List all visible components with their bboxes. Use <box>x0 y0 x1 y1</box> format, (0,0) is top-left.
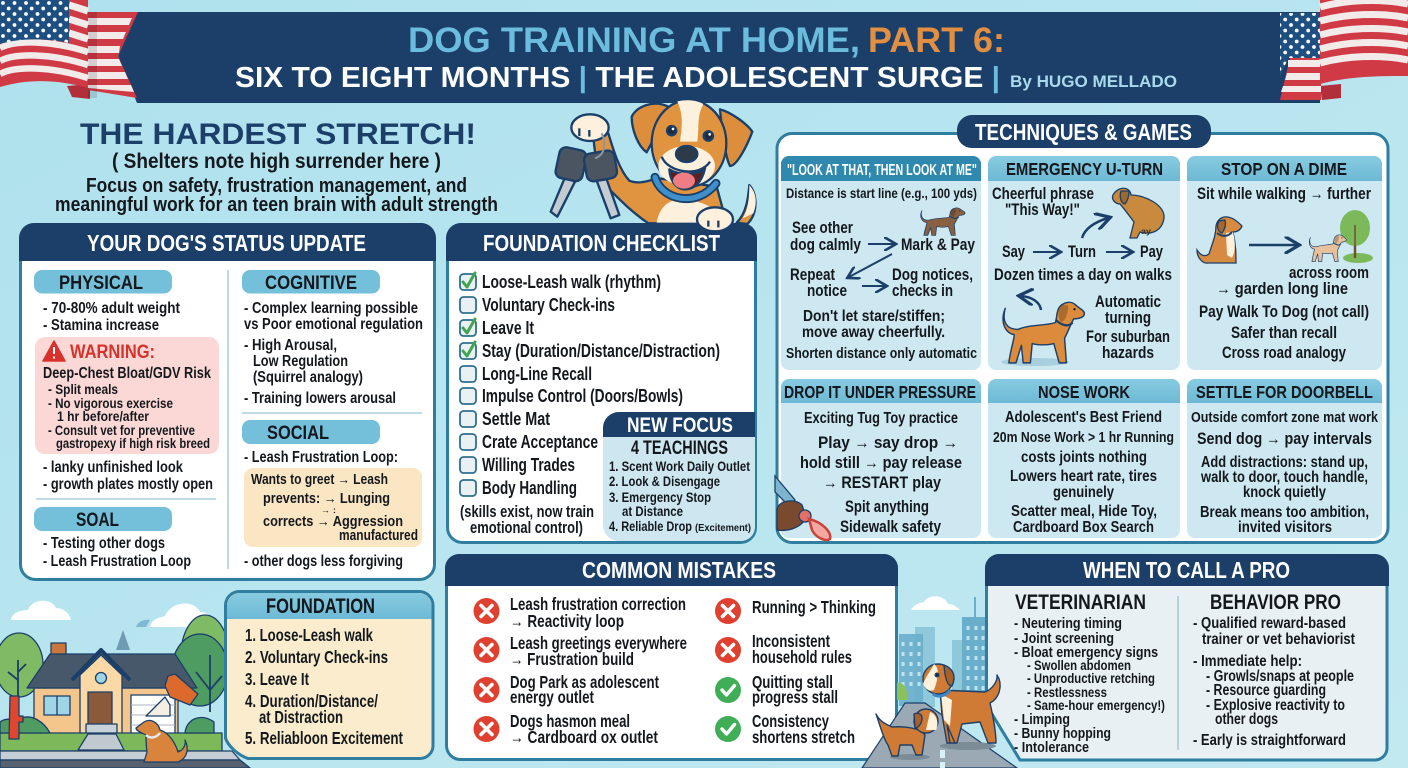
callout: frustration loop: Wants to greet → Leash <box>251 472 388 488</box>
behavior pro column: - Qualified reward-based <box>1193 615 1346 632</box>
behavior pro column: - Growls/snaps at people <box>1206 668 1354 685</box>
card: emergency u-turn: Dozen times a day on walks <box>994 266 1172 284</box>
right tree <box>172 615 229 712</box>
social section: SOCIAL <box>267 422 329 444</box>
icon: walking dog <box>1309 235 1346 262</box>
left tree <box>0 633 43 700</box>
card: look at that: checks in <box>892 282 953 300</box>
icon: left flag <box>0 0 138 99</box>
road <box>862 703 1017 768</box>
card: look at that: Dog notices, <box>892 266 973 284</box>
shelter note: ( Shelters note high surrender here ) <box>112 150 441 173</box>
panel: status update <box>19 223 436 580</box>
headline block <box>55 118 498 216</box>
checklist items: Crate Acceptance <box>482 431 598 452</box>
panel: foundation list <box>226 592 433 758</box>
checklist note <box>460 503 594 537</box>
physical section: - 70-80% adult weight <box>43 300 180 317</box>
card: stop on a dime: Safer than recall <box>1231 324 1337 342</box>
card: drop it under pressure: Exciting Tug Toy practice <box>804 410 958 427</box>
checklist items: Stay (Duration/Distance/Distraction) <box>482 340 720 361</box>
puppy <box>876 709 938 760</box>
social section: - Leash Frustration Loop: <box>244 449 398 466</box>
card: nose work <box>988 379 1180 538</box>
icon: orange toy on leash <box>146 674 198 716</box>
veterinarian column: - Swollen abdomen <box>1027 658 1131 673</box>
warning box: WARNING: <box>70 341 155 363</box>
status heading: YOUR DOG'S STATUS UPDATE <box>87 230 366 256</box>
checklist items: Body Handling <box>482 477 577 498</box>
warning box <box>35 337 219 454</box>
card: emergency u-turn: hazards <box>1102 344 1154 362</box>
focus sentence line two: meaningful work for an teen brain with adult strength <box>55 193 498 216</box>
icon: tug toy in hand <box>775 476 830 540</box>
physical notes: - lanky unfinished look <box>43 459 183 476</box>
warning box: gastropexy if high risk breed <box>56 436 210 451</box>
card: drop it under pressure: Sidewalk safety <box>840 518 942 536</box>
checklist items: Loose-Leash walk (rhythm) <box>482 271 661 292</box>
mistakes left column: → Frustration build <box>510 649 634 669</box>
byline: By HUGO MELLADO <box>1010 72 1177 91</box>
icon: right flag <box>1280 0 1408 100</box>
card: look at that: Shorten distance only automatic <box>786 346 977 362</box>
cognitive section: - Complex learning possible <box>244 300 418 317</box>
card: look at that: Mark & Pay <box>901 236 976 254</box>
card: settle for doorbell: Add distractions: stand up, <box>1201 454 1368 471</box>
warning box: - No vigorous exercise <box>48 396 173 411</box>
card: nose work: genuinely <box>1053 484 1114 501</box>
mistakes right column: progress stall <box>752 687 838 707</box>
illustration: suburban house scene <box>0 601 250 768</box>
callout: frustration loop: manufactured <box>339 528 418 544</box>
card: look at that: notice <box>807 282 847 300</box>
callout: frustration loop: corrects → Aggression <box>263 514 403 530</box>
icon: sitting dog <box>1197 217 1242 263</box>
foundation list items: 3. Leave It <box>245 669 309 689</box>
checklist items: Long-Line Recall <box>482 363 592 384</box>
checklist heading: FOUNDATION CHECKLIST <box>483 230 720 256</box>
arrow: notice to check-in <box>862 285 885 287</box>
card: settle for doorbell: Break means too ambition, <box>1200 504 1369 521</box>
card: look at that: Repeat <box>790 266 835 284</box>
panel: techniques and games <box>775 115 1388 542</box>
behavior pro column <box>1193 591 1355 749</box>
behavior pro column: BEHAVIOR PRO <box>1210 591 1341 614</box>
checklist items: Settle Mat <box>482 408 550 429</box>
card: drop it under pressure <box>781 379 981 538</box>
veterinarian column: - Unproductive retching <box>1027 671 1155 686</box>
physical notes <box>43 459 213 493</box>
callout: new focus: 1. Scent Work Daily Outlet <box>609 459 750 474</box>
house <box>27 643 197 734</box>
card: emergency u-turn: Say <box>1002 243 1026 261</box>
checklist items: Willing Trades <box>482 454 575 475</box>
arrow: say to turn <box>1033 251 1059 253</box>
arrow: turn to pay <box>1106 251 1131 253</box>
mistakes right column: Quitting stall <box>752 672 833 692</box>
card: settle for doorbell: Outside comfort zone mat work <box>1191 410 1379 426</box>
arrow: curved turn <box>1082 218 1108 238</box>
veterinarian column: VETERINARIAN <box>1015 591 1146 614</box>
social note: - other dogs less forgiving <box>244 553 403 570</box>
icon: fire hydrant <box>9 696 23 739</box>
card: settle for doorbell: knock quietly <box>1243 484 1326 501</box>
veterinarian column: - Limping <box>1014 712 1070 728</box>
cognitive section: - Training lowers arousal <box>244 390 396 407</box>
checklist items <box>460 271 720 498</box>
focus sentence line one: Focus on safety, frustration management, and <box>86 174 467 197</box>
behavior pro column: - Immediate help: <box>1193 653 1302 670</box>
card: nose work: Scatter meal, Hide Toy, <box>1011 503 1157 520</box>
warning box: - Consult vet for preventive <box>48 423 195 438</box>
card: stop on a dime: Cross road analogy <box>1222 344 1347 362</box>
card: emergency u-turn: Automatic <box>1095 293 1161 311</box>
checklist items: Leave It <box>482 317 534 338</box>
physical section: - Stamina increase <box>43 317 159 334</box>
card: emergency u-turn: EMERGENCY U-TURN <box>1006 159 1163 179</box>
card: stop on a dime: Sit while walking → further <box>1197 185 1371 203</box>
card: look at that: Don't let stare/stiffen; <box>803 308 945 325</box>
card: emergency u-turn: "This Way!" <box>1005 201 1080 219</box>
icon: main dog holding keys <box>551 100 756 231</box>
card: emergency u-turn: Turn <box>1068 243 1096 261</box>
panel: foundation checklist <box>446 223 757 542</box>
cognitive section: - High Arousal, <box>244 337 337 354</box>
callout: new focus: 4. Reliable Drop <box>609 519 692 534</box>
shrubs <box>0 717 214 733</box>
section pill heading: TECHNIQUES & GAMES <box>975 119 1192 145</box>
title banner <box>118 12 1320 103</box>
callout: frustration loop <box>244 468 422 547</box>
foundation heading: FOUNDATION <box>266 595 375 618</box>
callout: frustration loop: → : <box>321 506 336 515</box>
card: emergency u-turn: For suburban <box>1086 328 1170 346</box>
card: stop on a dime: across room <box>1289 264 1369 282</box>
behavior pro column: - Early is straightforward <box>1193 732 1346 749</box>
card: drop it under pressure: hold still → pay release <box>800 454 962 472</box>
arrow: sit to further <box>1249 244 1297 246</box>
card: nose work: costs joints nothing <box>1021 449 1147 466</box>
card: settle for doorbell: Send dog → pay intervals <box>1197 430 1372 448</box>
behavior pro column: trainer or vet behaviorist <box>1202 631 1355 648</box>
card: nose work: Adolescent's Best Friend <box>1005 409 1162 426</box>
physical section <box>34 270 180 334</box>
card: nose work: Cardboard Box Search <box>1013 519 1154 536</box>
foundation list items: 2. Voluntary Check-ins <box>245 647 388 667</box>
title line one: DOG TRAINING AT HOME, <box>408 21 860 60</box>
checklist items: Impulse Control (Doors/Bowls) <box>482 385 683 406</box>
checklist note: (skills exist, now train <box>460 503 594 521</box>
section pill heading <box>957 115 1211 148</box>
soal section: - Testing other dogs <box>43 535 165 552</box>
arrow: calm to mark <box>868 243 894 245</box>
mistakes right column: household rules <box>752 647 852 667</box>
card: stop on a dime: → garden long line <box>1216 280 1348 298</box>
mistakes right column: Running > Thinking <box>752 597 876 617</box>
physical notes: - growth plates mostly open <box>43 476 213 493</box>
icon: turning dog <box>1113 188 1164 238</box>
checklist note: emotional control) <box>470 519 583 537</box>
veterinarian column: - Intolerance <box>1014 740 1089 756</box>
arrow: turning back <box>1021 296 1041 310</box>
veterinarian column: - Same-hour emergency!) <box>1027 698 1165 713</box>
card: look at that: move away cheerfully. <box>802 324 945 341</box>
callout: new focus <box>603 412 755 541</box>
cognitive section <box>242 270 423 407</box>
social section <box>242 420 398 466</box>
warning box: Deep-Chest Bloat/GDV Risk <box>43 365 211 382</box>
callout: new focus: at Distance <box>622 504 683 519</box>
lawn and street <box>0 733 250 768</box>
card: nose work: NOSE WORK <box>1038 382 1130 402</box>
soal section: SOAL <box>76 509 119 531</box>
city buildings <box>899 597 986 710</box>
foundation list items: at Distraction <box>259 707 343 727</box>
checklist items: Voluntary Check-ins <box>482 294 615 315</box>
card: settle for doorbell <box>1187 379 1382 538</box>
cognitive section: Low Regulation <box>253 353 348 370</box>
icon: brown dog <box>921 208 965 235</box>
card: stop on a dime: STOP ON A DIME <box>1221 159 1347 179</box>
cognitive section: vs Poor emotional regulation <box>244 316 423 333</box>
illustration: city and road scene <box>862 596 1017 768</box>
card: drop it under pressure: Spit anything <box>845 498 929 516</box>
mistakes left column: Dog Park as adolescent <box>510 672 659 692</box>
mistakes right column: Consistency <box>752 711 829 731</box>
icon: warning triangle <box>43 341 65 361</box>
card: look at that <box>781 156 981 370</box>
card: settle for doorbell: SETTLE FOR DOORBELL <box>1196 382 1373 402</box>
callout: new focus: 2. Look & Disengage <box>609 474 720 489</box>
callout: new focus: NEW FOCUS <box>627 414 733 437</box>
soal section: - Leash Frustration Loop <box>43 553 191 570</box>
cognitive section: COGNITIVE <box>265 272 357 294</box>
veterinarian column: - Restlessness <box>1027 685 1107 700</box>
mistakes right column: shortens stretch <box>752 727 855 747</box>
mistakes left column: energy outlet <box>510 687 594 707</box>
veterinarian column: - Neutering timing <box>1014 616 1122 632</box>
icon: adult dog and puppy <box>876 664 1000 760</box>
mistakes left column: Leash frustration correction <box>510 594 686 614</box>
title part number: PART 6: <box>868 21 1005 60</box>
mistakes left column: Leash greetings everywhere <box>510 633 687 653</box>
callout: frustration loop: prevents: → Lunging <box>263 491 390 507</box>
clouds <box>11 601 216 627</box>
callout: new focus: 3. Emergency Stop <box>609 490 711 505</box>
callout: new focus: 4 TEACHINGS <box>631 437 728 459</box>
panel: common mistakes <box>445 554 898 760</box>
warning box: 1 hr before/after <box>57 409 150 424</box>
bush <box>897 683 908 700</box>
card: stop on a dime <box>1187 156 1382 370</box>
behavior pro column: other dogs <box>1215 711 1278 728</box>
icon: sitting puppy <box>136 720 187 762</box>
icons: status marks <box>474 598 741 742</box>
cognitive section: (Squirrel analogy) <box>253 369 363 386</box>
veterinarian column: - Bloat emergency signs <box>1014 645 1158 661</box>
card: settle for doorbell: walk to door, touch handle, <box>1200 469 1368 486</box>
card: nose work: 20m Nose Work > 1 hr Running <box>993 430 1174 446</box>
icon: orange dog standing <box>1001 302 1084 366</box>
soal section <box>34 507 191 570</box>
foundation list items: 4. Duration/Distance/ <box>245 691 378 711</box>
behavior pro column: - Explosive reactivity to <box>1206 697 1345 714</box>
mistakes right column: Inconsistent <box>752 631 830 651</box>
foundation list items <box>245 625 403 748</box>
cloud <box>911 596 960 610</box>
card: emergency u-turn: turning <box>1105 309 1151 327</box>
physical section: PHYSICAL <box>59 272 143 294</box>
mistakes left column <box>510 594 687 747</box>
card: look at that: "LOOK AT THAT, THEN LOOK AT ME" <box>787 162 977 179</box>
pro heading: WHEN TO CALL A PRO <box>1083 557 1290 583</box>
icon: tree <box>1340 210 1373 263</box>
foundation list items: 1. Loose-Leash walk <box>245 625 373 645</box>
panel: when to call a pro <box>985 554 1389 760</box>
behavior pro column: - Resource guarding <box>1206 682 1326 699</box>
foundation list items: 5. Reliabloon Excitement <box>245 728 403 748</box>
mistakes left column: Dogs hasmon meal <box>510 711 630 731</box>
adult dog <box>923 664 1000 750</box>
card: drop it under pressure: Play → say drop → <box>818 434 958 452</box>
card: drop it under pressure: → RESTART play <box>823 474 942 492</box>
mistakes right column <box>752 597 876 747</box>
arrow: mark to repeat <box>849 254 892 277</box>
callout: new focus: (Excitement) <box>695 522 751 534</box>
mistakes heading: COMMON MISTAKES <box>582 557 776 583</box>
veterinarian column <box>1014 591 1165 756</box>
mistakes left column: → Cardboard ox outlet <box>510 727 658 747</box>
veterinarian column: - Joint screening <box>1014 631 1114 647</box>
card: settle for doorbell: invited visitors <box>1238 519 1332 536</box>
headline: THE HARDEST STRETCH! <box>80 118 476 151</box>
card: emergency u-turn: Cheerful phrase <box>992 185 1094 203</box>
card: emergency u-turn <box>988 156 1180 370</box>
mistakes left column: → Reactivity loop <box>510 611 624 631</box>
card: look at that: See other <box>792 219 853 237</box>
veterinarian column: - Bunny hopping <box>1014 726 1111 742</box>
card: look at that: dog calmly <box>790 236 862 254</box>
card: look at that: Distance is start line (e.g., 100 yds) <box>786 186 977 201</box>
icon: turning dog: ay <box>1141 227 1152 236</box>
card: drop it under pressure: DROP IT UNDER PRESSURE <box>784 382 976 402</box>
card: nose work: Lowers heart rate, tires <box>1010 468 1157 485</box>
card: emergency u-turn: Pay <box>1140 243 1164 261</box>
card: stop on a dime: Pay Walk To Dog (not call) <box>1199 303 1369 321</box>
subtitle: SIX TO EIGHT MONTHS | THE ADOLESCENT SURGE | <box>235 62 1000 94</box>
warning box: - Split meals <box>48 382 118 397</box>
